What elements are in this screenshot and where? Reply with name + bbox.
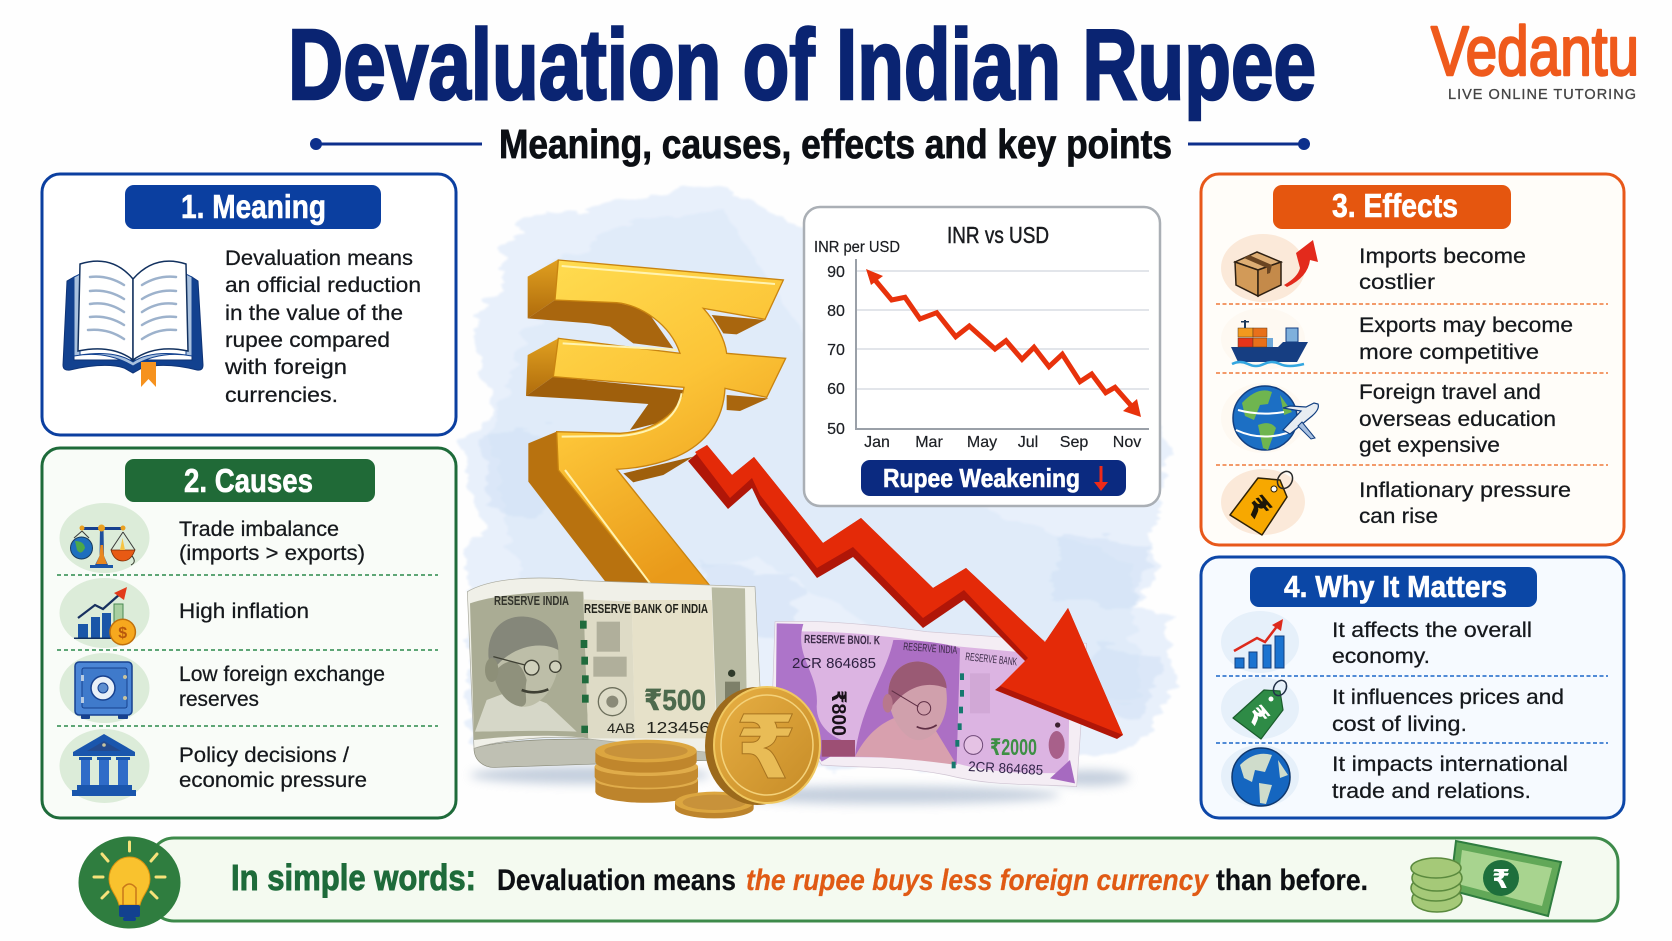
text: effect 4 (1359, 479, 1571, 528)
illustration: 2000 rupee note: RESERVE BANK (965, 651, 1018, 668)
icon: amber price tag (1230, 469, 1296, 535)
icon: light bulb (78, 836, 180, 928)
icon: parcel with rising arrow (1235, 240, 1318, 296)
label: In simple words: In simple words: (231, 857, 476, 898)
illustration: 500 rupee note: ₹500 (644, 685, 706, 717)
logo: Vedantu: LIVE ONLINE TUTORING (1448, 87, 1636, 103)
icon: rupee bill and coins (1411, 841, 1561, 916)
text: effect 3: get expensive (1359, 434, 1500, 457)
icon: rising bars and coin (74, 587, 135, 645)
text: cause 1 (179, 518, 365, 565)
text: cause 3 (179, 663, 385, 711)
illustration: 2000 rupee note (773, 621, 1087, 787)
note shadows (470, 766, 1130, 804)
text: meaning definition: in the value of the (225, 302, 403, 325)
x axis labels: Jan (864, 434, 890, 451)
text: matter 1 (1332, 619, 1532, 668)
icon: open book (63, 261, 203, 387)
y axis labels: 90 (827, 264, 845, 281)
icon: balance scale (70, 524, 135, 568)
text: cause 4 (179, 744, 367, 792)
icon: green price tag (1233, 678, 1289, 739)
illustration: 2000 rupee note: ₹2000 (990, 734, 1037, 760)
text: effect 1 (1359, 245, 1526, 294)
subtitle with side rules: Meaning, causes, effects and key points (499, 121, 1172, 167)
heading: 2. Causes (125, 459, 375, 502)
icon: amber price tag: ₹ (1238, 490, 1277, 527)
panel: 2. Causes (42, 448, 456, 818)
x axis labels (864, 434, 1141, 451)
text: meaning definition: with foreign (224, 356, 347, 379)
text: matter 2 (1332, 686, 1564, 736)
text: effect 3: Foreign travel and (1359, 381, 1541, 404)
text: effect 1: costlier (1359, 271, 1435, 294)
illustration: 2000 rupee note: RESERVE BNOI. K (804, 632, 880, 647)
text: matter 3: It impacts international (1332, 753, 1568, 776)
illustration: 500 rupee note: 123456 (646, 720, 710, 737)
illustration: 2000 rupee note: ₹800 (827, 690, 849, 736)
watercolor background wash (458, 184, 1178, 770)
illustration: 500 rupee note: 4AB (607, 720, 635, 736)
sentence: Devaluation means (497, 864, 736, 897)
icon: cargo ship (1231, 320, 1308, 366)
panel: 4. Why It Matters (1201, 557, 1624, 818)
illustration: large rupee coin: ₹ (735, 698, 797, 797)
text: cause 2: High inflation (179, 600, 309, 623)
text: cause 3: Low foreign exchange (179, 663, 385, 686)
title: Devaluation of Indian Rupee (288, 9, 1316, 121)
sentence: than before. (1216, 864, 1368, 897)
y axis labels: 80 (827, 303, 845, 320)
panel: 1. Meaning (42, 174, 456, 435)
icon: rupee bill and coins: ₹ (1492, 864, 1510, 894)
icon: rising bars and coin: $ (118, 625, 127, 642)
text: meaning definition (224, 247, 421, 407)
text: effect 3: overseas education (1359, 408, 1556, 431)
text: matter 1: It affects the overall (1332, 619, 1532, 642)
heading: 3. Effects: 3. Effects (1332, 187, 1458, 224)
sentence: the rupee buys less foreign currency (746, 864, 1209, 897)
label: Rupee Weakening: Rupee Weakening (883, 463, 1080, 493)
y axis labels (827, 264, 845, 438)
text: matter 3 (1332, 753, 1568, 803)
text: cause 3: reserves (179, 688, 259, 711)
icon: safe (75, 662, 132, 719)
heading: 2. Causes: 2. Causes (184, 462, 313, 499)
text: effect 2 (1359, 314, 1573, 364)
text: cause 1: Trade imbalance (179, 518, 339, 541)
text: effect 2: more competitive (1359, 341, 1539, 364)
text: effect 3 (1359, 381, 1556, 457)
text: matter 1: economy. (1332, 645, 1430, 668)
heading: 4. Why It Matters: 4. Why It Matters (1284, 569, 1507, 604)
arrow: large red zig-zag decline (688, 445, 1123, 739)
y axis labels: 50 (827, 421, 845, 438)
text: matter 3: trade and relations. (1332, 780, 1531, 803)
chart card: INR vs USD (804, 207, 1160, 506)
Gandhi portrait, 2000 note (855, 662, 957, 765)
illustration: coin stack (595, 740, 754, 818)
text: effect 4: can rise (1359, 505, 1438, 528)
x axis labels: Jul (1018, 434, 1038, 451)
x axis labels: Mar (915, 434, 943, 451)
text: effect 2: Exports may become (1359, 314, 1573, 337)
text: effect 1: Imports become (1359, 245, 1526, 268)
x axis labels: Nov (1113, 434, 1141, 451)
icon: economy chart (1234, 619, 1284, 668)
Gandhi portrait, 500 note (475, 617, 577, 732)
text: effect 4: Inflationary pressure (1359, 479, 1571, 502)
text: matter 2: cost of living. (1332, 713, 1467, 736)
heading: 3. Effects (1273, 185, 1511, 229)
line chart: rupee falling (866, 269, 1141, 417)
text: cause 4: Policy decisions / (179, 744, 349, 767)
illustration: 2000 rupee note: 2CR 864685 (792, 655, 876, 672)
icon: green price tag: ₹ (1241, 699, 1275, 733)
icon: government building (72, 734, 136, 796)
illustration: 2000 rupee note: RESERVE INDIA (903, 641, 958, 657)
text: meaning definition: Devaluation means (225, 247, 413, 270)
illustration: gold rupee symbol (526, 259, 786, 586)
text: meaning definition: an official reduction (225, 274, 421, 297)
y axis labels: 60 (827, 381, 845, 398)
chart title: INR vs USD (947, 222, 1049, 248)
illustration: 500 rupee note: RESERVE INDIA (494, 594, 569, 608)
illustration: 2000 rupee note: 2CR 864685 (968, 758, 1044, 778)
text: cause 1: (imports > exports) (179, 542, 365, 565)
text: matter 2: It influences prices and (1332, 686, 1564, 709)
x axis labels: Sep (1060, 434, 1088, 451)
banner: in simple words (78, 836, 1618, 928)
y axis title: INR per USD (814, 239, 900, 256)
x axis labels: May (967, 434, 997, 451)
illustration: 500 rupee note: RESERVE BANK OF INDIA (584, 601, 708, 616)
icon: globe with airplane (1233, 386, 1318, 450)
icon: globe (1232, 748, 1290, 806)
text: meaning definition: rupee compared (225, 329, 390, 352)
panel: 3. Effects (1201, 174, 1624, 545)
illustration: large rupee coin (705, 687, 820, 805)
sentence (497, 864, 1368, 897)
text: meaning definition: currencies. (225, 384, 338, 407)
y axis labels: 70 (827, 342, 845, 359)
heading: 1. Meaning: 1. Meaning (181, 188, 326, 225)
text: cause 4: economic pressure (179, 769, 367, 792)
heading: 1. Meaning (125, 185, 381, 229)
illustration: 500 rupee note (467, 578, 760, 767)
